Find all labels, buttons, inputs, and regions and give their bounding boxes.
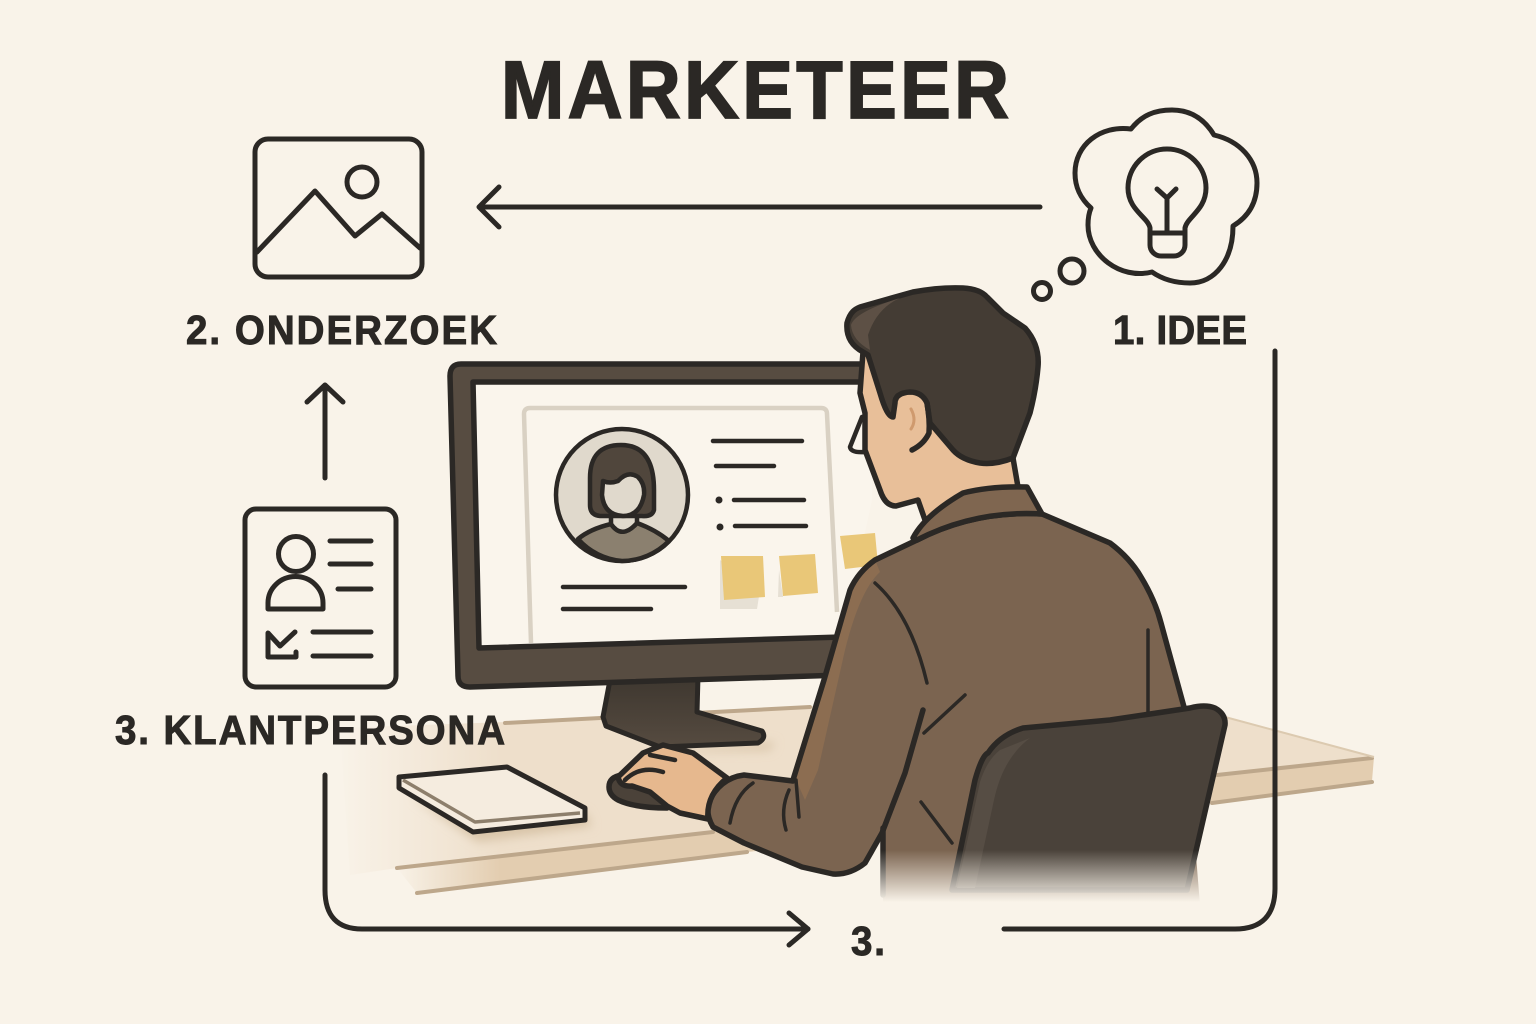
persona avatar bbox=[556, 429, 688, 561]
screen panel bbox=[524, 408, 837, 643]
screen text lines bbox=[563, 441, 806, 609]
monitor screen bbox=[473, 382, 872, 648]
title: MARKETEER bbox=[501, 45, 1009, 136]
arrow: idee to onderzoek bbox=[479, 187, 1040, 227]
bottom fade bbox=[875, 850, 1205, 906]
jacket outline bbox=[793, 514, 1184, 780]
person bbox=[609, 288, 1200, 905]
mouse bbox=[609, 775, 667, 808]
fingers bbox=[625, 755, 675, 780]
desk bbox=[340, 706, 1374, 893]
chair bbox=[952, 706, 1225, 890]
label: 3. klantpersona: 3. KLANTPERSONA bbox=[115, 708, 505, 753]
monitor bbox=[450, 364, 878, 747]
monitor frame bbox=[450, 364, 870, 687]
hair bbox=[847, 288, 1038, 463]
label: 3.: 3. bbox=[851, 919, 885, 964]
soft shadows bbox=[410, 742, 775, 842]
arrow: klantpersona to step 3 bbox=[325, 775, 808, 945]
hand bbox=[618, 745, 727, 819]
jacket fill bbox=[708, 487, 1200, 905]
ear bbox=[912, 403, 929, 450]
face outline bbox=[860, 352, 1018, 520]
arrow: idee loop line bbox=[1004, 351, 1275, 929]
label: 2. onderzoek: 2. ONDERZOEK bbox=[186, 308, 497, 353]
neck and face fill bbox=[860, 352, 1025, 525]
icon: persona card bbox=[245, 509, 396, 687]
chair side highlight bbox=[957, 738, 1030, 888]
monitor stand bbox=[603, 676, 764, 747]
notebook bbox=[399, 767, 585, 832]
glasses bbox=[850, 417, 865, 452]
clothing folds bbox=[730, 583, 1148, 843]
icon: image for onderzoek bbox=[255, 139, 422, 277]
collar bbox=[913, 487, 1042, 540]
arrow: klantpersona to onderzoek bbox=[307, 385, 343, 478]
hair highlight bbox=[851, 298, 900, 350]
sleeve highlight bbox=[796, 560, 880, 800]
icon: thought cloud with light bulb bbox=[1034, 110, 1257, 300]
label: 1. idee: 1. IDEE bbox=[1113, 308, 1247, 353]
sticky notes bbox=[720, 533, 878, 609]
screen bullets bbox=[716, 496, 724, 530]
